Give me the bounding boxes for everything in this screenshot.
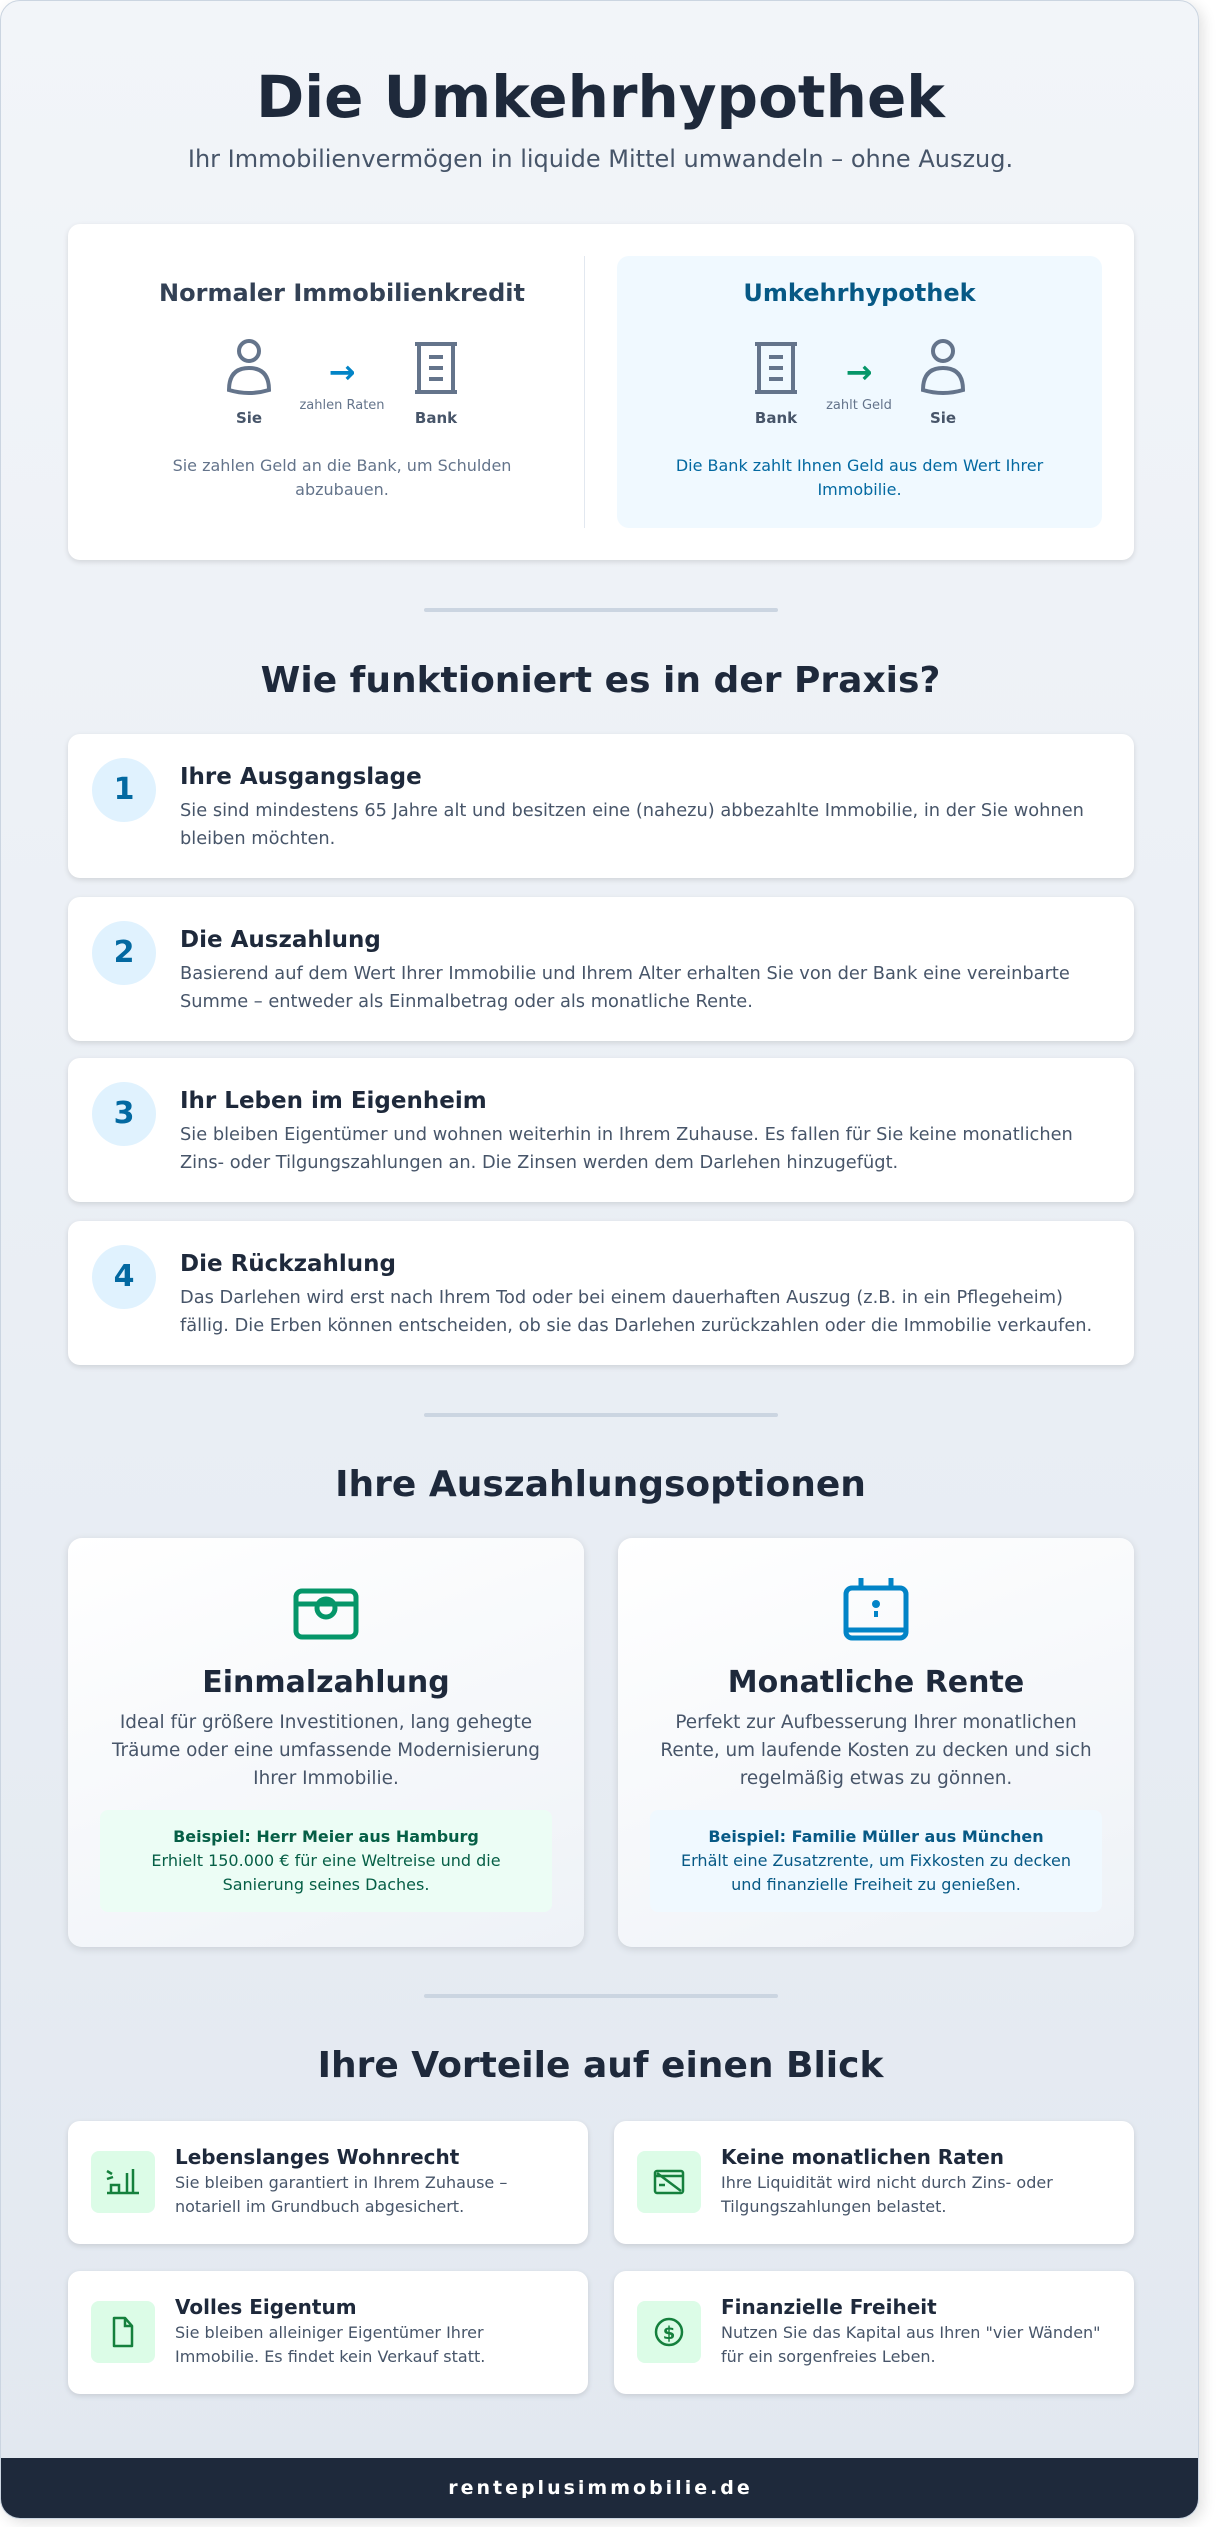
benefit: keine Raten: Tilgungszahlungen belastet. xyxy=(721,2197,946,2216)
icon: person xyxy=(227,339,271,395)
step 2 xyxy=(68,897,1134,1041)
icon: bank xyxy=(415,342,457,394)
arrow: green: → xyxy=(846,353,872,391)
text: normal description: Sie zahlen Geld an die Bank, um Schulden abzubauen. xyxy=(173,456,511,499)
label: Sie: Sie xyxy=(930,409,956,427)
benefit: Wohnrecht xyxy=(68,2121,588,2244)
callout: example: Erhält eine Zusatzrente, um Fixkosten zu decken xyxy=(681,1851,1071,1870)
panel: reverse mortgage xyxy=(617,256,1102,528)
benefit: Wohnrecht: notariell im Grundbuch abgesichert. xyxy=(175,2197,464,2216)
text: reverse description: Die Bank zahlt Ihnen Geld aus dem Wert Ihrer Immobilie. xyxy=(676,456,1043,499)
heading: practice: Wie funktioniert es in der Praxis? xyxy=(261,660,940,701)
arrow: blue: → xyxy=(329,353,355,391)
step 2: Basierend auf dem Wert Ihrer Immobilie und Ihrem Alter erhalten Sie von der Bank eine vereinbarte Summe – entweder als Einmalbetrag oder als monatliche Rente. xyxy=(180,963,1070,1012)
step 4 xyxy=(68,1221,1134,1365)
heading: normal loan: Normaler Immobilienkredit xyxy=(159,279,525,307)
benefit: Wohnrecht: Lebenslanges Wohnrecht xyxy=(175,2145,459,2169)
step 1 xyxy=(68,734,1134,878)
step 1: 1 xyxy=(114,772,134,807)
step 2: 2 xyxy=(114,935,134,970)
benefit: keine Raten: Keine monatlichen Raten xyxy=(721,2145,1004,2169)
callout: example xyxy=(650,1810,1102,1912)
callout: example xyxy=(100,1810,552,1912)
step 1: Sie sind mindestens 65 Jahre alt und besitzen eine (nahezu) abbezahlte Immobilie, in der Sie wohnen bleiben möchten. xyxy=(180,800,1084,849)
step 4: 4 xyxy=(114,1259,134,1294)
footer: renteplusimmobilie.de xyxy=(448,2477,753,2499)
icon xyxy=(637,2151,701,2213)
heading: payout options: Ihre Auszahlungsoptionen xyxy=(335,1464,866,1505)
step 3 xyxy=(68,1058,1134,1202)
step 4: Die Rückzahlung xyxy=(180,1251,396,1277)
label: Bank: Bank xyxy=(755,409,797,427)
benefit: Freiheit: Finanzielle Freiheit xyxy=(721,2295,937,2319)
callout: example: und finanzielle Freiheit zu genießen. xyxy=(731,1875,1021,1894)
callout: example: Beispiel: Familie Müller aus München xyxy=(708,1827,1044,1846)
benefit: Eigentum: Immobilie. Es findet kein Verkauf statt. xyxy=(175,2347,485,2366)
step 1: Ihre Ausgangslage xyxy=(180,764,422,790)
text: Perfekt zur Aufbesserung Ihrer monatlichen Rente, um laufende Kosten zu decken und sich regelmäßig etwas zu gönnen. xyxy=(660,1712,1092,1789)
step 4: Das Darlehen wird erst nach Ihrem Tod oder bei einem dauerhaften Auszug (z.B. in ein Pflegeheim) fällig. Die Erben können entscheiden, ob sie das Darlehen zurückzahlen oder die Immobilie verkaufen. xyxy=(180,1287,1092,1336)
benefit: keine Raten: Ihre Liquidität wird nicht durch Zins- oder xyxy=(721,2173,1053,2192)
callout: example: Sanierung seines Daches. xyxy=(223,1875,429,1894)
label: zahlt Geld: zahlt Geld xyxy=(826,398,892,413)
benefit: Freiheit: für ein sorgenfreies Leben. xyxy=(721,2347,936,2366)
panel: normal loan xyxy=(159,279,525,499)
icon: money xyxy=(294,1588,358,1640)
icon: $ xyxy=(663,2323,675,2344)
title: Monatliche Rente xyxy=(728,1665,1024,1700)
footer xyxy=(1,2458,1200,2520)
panel: lump sum xyxy=(68,1538,584,1947)
icon: bank xyxy=(755,342,797,394)
label: Sie: Sie xyxy=(236,409,262,427)
text: Ideal für größere Investitionen, lang gehegte Träume oder eine umfassende Modernisierung Ihrer Immobilie. xyxy=(112,1712,540,1789)
benefit: Eigentum: Sie bleiben alleiniger Eigentümer Ihrer xyxy=(175,2323,484,2342)
icon xyxy=(91,2301,155,2363)
icon xyxy=(91,2151,155,2213)
benefit: Eigentum: Volles Eigentum xyxy=(175,2295,357,2319)
step 3: Sie bleiben Eigentümer und wohnen weiterhin in Ihrem Zuhause. Es fallen für Sie keine monatlichen Zins- oder Tilgungszahlungen an. Die Zinsen werden dem Darlehen hinzugefügt. xyxy=(180,1124,1073,1173)
title: Die Umkehrhypothek xyxy=(256,63,945,131)
icon: calendar xyxy=(844,1578,908,1640)
callout: example: Erhielt 150.000 € für eine Weltreise und die xyxy=(151,1851,501,1870)
label: Bank: Bank xyxy=(415,409,457,427)
icon xyxy=(637,2301,701,2363)
benefit: Eigentum xyxy=(68,2271,588,2394)
panel: monthly xyxy=(618,1538,1134,1947)
callout: example: Beispiel: Herr Meier aus Hamburg xyxy=(173,1827,479,1846)
panel: comparison xyxy=(68,224,1134,560)
subtitle: Ihr Immobilienvermögen in liquide Mittel umwandeln – ohne Auszug. xyxy=(188,145,1013,173)
heading: reverse mortgage: Umkehrhypothek xyxy=(743,279,976,307)
benefit: keine Raten xyxy=(614,2121,1134,2244)
heading: benefits: Ihre Vorteile auf einen Blick xyxy=(318,2045,883,2086)
step 3: 3 xyxy=(114,1096,134,1131)
icon: person xyxy=(921,339,965,395)
label: zahlen Raten: zahlen Raten xyxy=(299,398,385,413)
step 2: Die Auszahlung xyxy=(180,927,381,953)
benefit: Wohnrecht: Sie bleiben garantiert in Ihrem Zuhause – xyxy=(175,2173,507,2192)
benefit: Freiheit: Nutzen Sie das Kapital aus Ihren "vier Wänden" xyxy=(721,2323,1101,2342)
step 3: Ihr Leben im Eigenheim xyxy=(180,1088,487,1114)
title: Einmalzahlung xyxy=(202,1665,450,1700)
benefit: Freiheit xyxy=(614,2271,1134,2394)
